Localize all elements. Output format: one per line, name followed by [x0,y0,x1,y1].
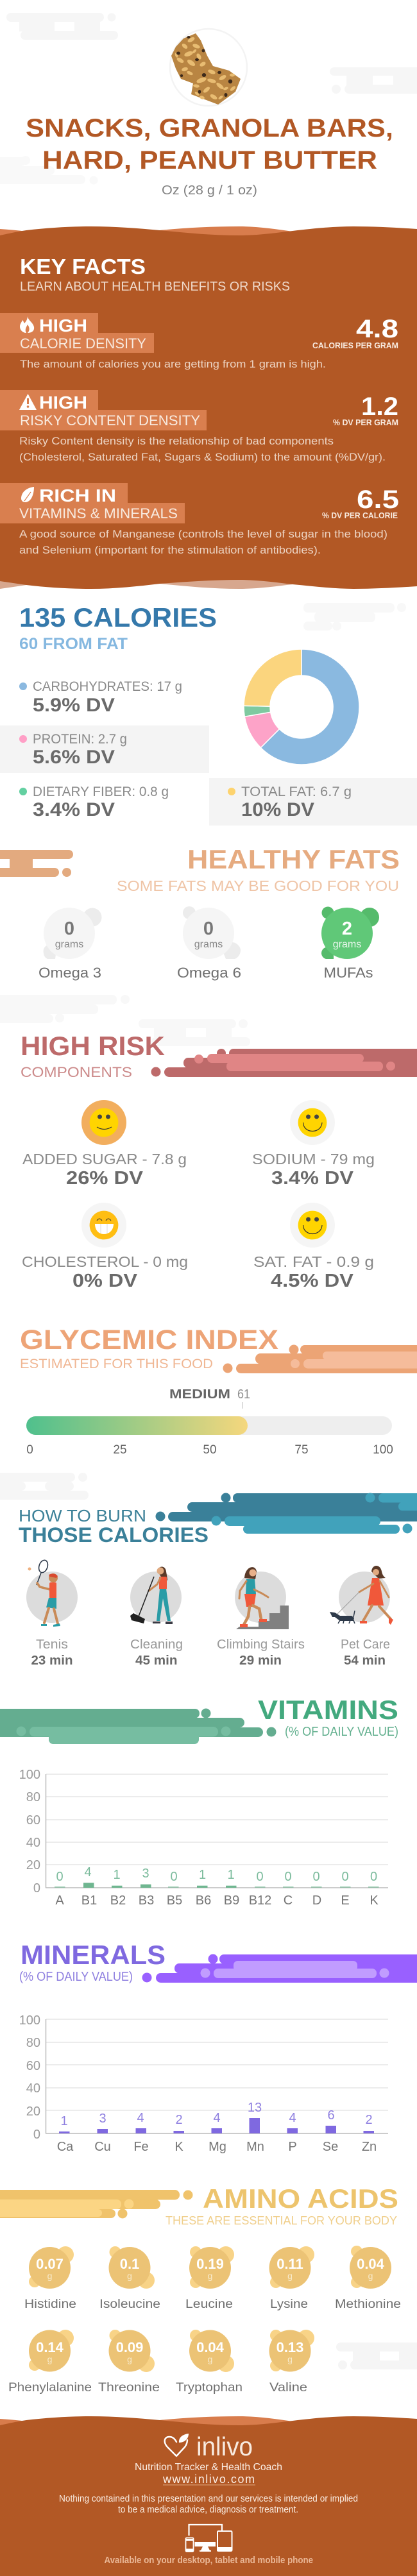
x axis labels: Cu [94,2140,111,2154]
item: added sugar [22,1100,187,1189]
value labels: 3 [142,1867,149,1881]
value labels: 0 [341,1870,349,1884]
fact: rich in vitamins and minerals [0,483,399,556]
badge: omega 3: Omega 3 [38,965,101,981]
value labels: 1 [227,1868,235,1882]
amino: methionine: Methionine [335,2297,401,2311]
heading: HEALTHY FATS [187,844,400,874]
activity: tennis: 23 min [31,1654,73,1668]
heading line 2: THOSE CALORIES [19,1523,208,1546]
badge: MUFAs: 2 [342,919,352,939]
y axis labels: 100 [19,1768,40,1782]
activity: pet care [330,1566,393,1668]
fact: calorie density: 4.8 [356,315,398,343]
item: saturated fat [253,1203,374,1291]
value labels [56,1865,377,1884]
legend: carbohydrates: 5.9% DV [33,695,115,716]
item: added sugar: ADDED SUGAR - 7.8 g [22,1151,187,1167]
amino: threonine [98,2330,160,2394]
amino: valine: Valine [269,2380,307,2394]
amino: histidine: 0.07 [36,2256,64,2272]
gauge scale: 0 [26,1443,33,1457]
value labels: 4 [289,2111,296,2125]
amino: threonine: 0.09 [116,2339,143,2355]
heading: VITAMINS [258,1695,398,1725]
amino: isoleucine: 0.1 [120,2256,139,2272]
legend: dietary fiber: 3.4% DV [33,799,115,820]
decorative bars [223,1344,417,1373]
amino: phenylalanine [8,2330,92,2394]
heading: key facts: KEY FACTS [20,255,146,278]
x axis labels: B1 [81,1894,97,1908]
fact: risky content density: RISKY CONTENT DENSITY [20,412,200,428]
x axis labels: K [174,2140,183,2154]
x axis labels: B12 [249,1894,271,1908]
amino: tryptophan [176,2330,243,2394]
tagline: Nutrition Tracker & Health Coach [135,2462,282,2473]
activity: cleaning: Cleaning [130,1638,183,1652]
gauge scale: 50 [203,1443,217,1457]
badge: omega 6: grams [194,939,223,950]
x axis labels: B9 [224,1894,239,1908]
amino: threonine: Threonine [98,2380,160,2394]
x axis labels: K [370,1894,379,1908]
badge: omega 6: 0 [203,919,214,939]
amino: isoleucine: Isoleucine [99,2297,160,2311]
fact: rich in vitamins and minerals: VITAMINS & MINERALS [19,505,178,521]
x axis labels: C [284,1894,293,1908]
vitamins bar chart [19,1768,388,1908]
x axis labels: D [312,1894,321,1908]
fact: calorie density: CALORIE DENSITY [20,335,146,352]
x axis labels: A [55,1894,64,1908]
cloud [336,2343,417,2369]
value labels: 0 [370,1870,377,1884]
fact: rich in vitamins and minerals: RICH IN [39,486,116,505]
gauge reading: 61 [237,1387,250,1402]
badge: MUFAs [321,907,379,981]
decorative bars [0,1709,276,1744]
panel: vitamins [0,1695,398,1908]
panel: amino acids [0,2183,417,2394]
panel: healthy fats [0,844,400,981]
gridlines [46,1774,388,1865]
amino: leucine: 0.19 [196,2256,224,2272]
y axis labels [19,2013,40,2142]
activity: cleaning [130,1566,183,1668]
panel waves [0,226,417,589]
x axis labels: B6 [196,1894,211,1908]
disclaimer: to be a medical advice, diagnosis or treatment. [118,2504,298,2515]
gauge bar [26,1416,392,1435]
amino: leucine: Leucine [185,2297,233,2311]
value labels: 6 [327,2108,335,2123]
item: cholesterol [22,1203,188,1291]
amino: lysine [269,2246,314,2311]
fact: calorie density: CALORIES PER GRAM [312,341,398,350]
cloud left lower [0,156,98,185]
activity: climbing stairs: Climbing Stairs [217,1638,305,1652]
x axis labels: B3 [139,1894,154,1908]
cloud [303,603,406,631]
logo: inlivo: inlivo [196,2432,253,2461]
y axis labels: 60 [26,1813,40,1827]
item: added sugar: 26% DV [66,1168,144,1189]
x axis labels: B5 [167,1894,182,1908]
fact: rich in vitamins and minerals: % DV PER CALORIE [322,511,398,520]
icon: flame [20,316,34,333]
item: saturated fat: SAT. FAT - 0.9 g [253,1253,374,1270]
badge: MUFAs: MUFAs [323,965,373,981]
cloud top left [6,13,118,40]
heading: AMINO ACIDS [203,2183,398,2214]
subheading: LEARN ABOUT HEALTH BENEFITS OR RISKS [20,280,290,294]
food ring [170,29,247,106]
y axis labels: 20 [26,2105,40,2119]
fact: rich in vitamins and minerals: A good source of Manganese (controls the level of sugar in the blood) [19,529,387,540]
decorative bars [0,2190,192,2218]
value labels: 0 [256,1870,264,1884]
decorative bars [151,1049,417,1077]
value labels: 3 [99,2112,106,2126]
y axis labels: 100 [19,2013,40,2028]
panel: key facts [0,226,417,589]
heading: MINERALS [21,1940,166,1970]
legend: total fat: TOTAL FAT: 6.7 g [241,784,352,799]
x axis labels: Zn [362,2140,377,2154]
gauge scale: 75 [294,1443,309,1457]
item: cholesterol: CHOLESTEROL - 0 mg [22,1253,188,1270]
badge: MUFAs: grams [333,939,361,950]
fact: risky content density: % DV PER GRAM [333,418,398,427]
value labels: 0 [312,1870,320,1884]
footer background waves [0,2416,417,2576]
amino: methionine: g [368,2271,373,2281]
badge: omega 3: 0 [64,919,74,939]
panel: glycemic index [20,1325,417,1457]
amino: tryptophan: 0.04 [196,2339,225,2355]
subheading: 60 from fat: 60 FROM FAT [19,635,128,653]
title: HARD, PEANUT BUTTER [42,146,377,174]
gauge scale [26,1443,393,1457]
amino: phenylalanine: 0.14 [36,2339,64,2355]
legend: protein [19,732,127,768]
legend: protein: 5.6% DV [33,747,115,768]
badge: omega 6: Omega 6 [177,965,241,981]
badge: omega 6 [177,906,241,981]
amino: isoleucine: g [127,2271,132,2281]
x axis labels: P [288,2140,297,2154]
y axis labels: 0 [33,2128,40,2142]
panel: minerals [19,1940,417,2154]
cloud [0,1473,89,1500]
amino: valine: 0.13 [277,2339,303,2355]
heading: GLYCEMIC INDEX [20,1325,278,1355]
value labels: 2 [175,2113,183,2127]
panel: calories [0,602,417,826]
amino: histidine [24,2246,76,2311]
legend: total fat [228,784,352,820]
amino: lysine: 0.11 [277,2256,303,2272]
activity: tennis [26,1559,78,1668]
value labels: 2 [365,2113,373,2127]
item: sodium [252,1100,375,1189]
panel: footer [0,2416,417,2576]
y axis labels [19,1768,40,1895]
website: www.inlivo.com [162,2473,255,2486]
disclaimer [59,2493,358,2515]
gauge scale: 25 [113,1443,127,1457]
value labels: 1 [60,2114,68,2128]
disclaimer: Nothing contained in this presentation and our services is intended or implied [59,2493,358,2504]
amino: tryptophan: Tryptophan [176,2380,243,2394]
row backgrounds [0,725,417,826]
fact: risky content density: Risky Content density is the relationship of bad components [19,436,334,447]
y axis labels: 0 [33,1881,40,1895]
header section [0,13,417,198]
legend: carbohydrates [19,679,182,716]
x axis labels: Se [323,2140,338,2154]
item: saturated fat: 4.5% DV [271,1271,354,1291]
subheading: ESTIMATED FOR THIS FOOD [20,1357,213,1371]
value labels: 1 [199,1868,206,1882]
serving size: Oz (28 g / 1 oz) [162,183,257,198]
item: cholesterol: 0% DV [72,1271,138,1291]
fact: calorie density: HIGH [39,316,87,335]
title [26,114,393,174]
amino: phenylalanine: g [47,2354,52,2364]
logo: inlivo [165,2432,253,2461]
legend: total fat: 10% DV [241,799,314,820]
icon: devices [185,2525,232,2552]
minerals bar chart [19,2013,388,2154]
fact: rich in vitamins and minerals: 6.5 [357,486,399,514]
amino: phenylalanine: Phenylalanine [8,2380,92,2394]
title: SNACKS, GRANOLA BARS, [26,114,393,142]
x axis labels: Mg [208,2140,226,2154]
amino: histidine: g [47,2271,52,2281]
y axis labels: 80 [26,1790,40,1804]
subheading: (% OF DAILY VALUE) [285,1725,398,1739]
gridlines [46,2019,388,2110]
legend: dietary fiber: DIETARY FIBER: 0.8 g [33,784,169,799]
bars [59,2118,374,2133]
amino: threonine: g [127,2354,132,2364]
x axis labels: Fe [133,2140,149,2154]
subheading: SOME FATS MAY BE GOOD FOR YOU [117,877,399,894]
amino: lysine: g [287,2271,293,2281]
amino: valine: g [287,2354,293,2364]
fact: risky content density: HIGH [39,393,87,412]
amino: tryptophan: g [208,2354,212,2364]
item: sodium: SODIUM - 79 mg [252,1151,375,1167]
subheading: COMPONENTS [21,1064,132,1080]
legend: dietary fiber [19,784,169,820]
amino: histidine: Histidine [24,2297,76,2311]
gauge scale: 100 [373,1443,393,1457]
legend: protein: PROTEIN: 2.7 g [33,732,127,747]
x axis labels: B2 [110,1894,126,1908]
item: sodium: 3.4% DV [271,1168,354,1189]
value labels: 4 [84,1865,92,1879]
amino: methionine: 0.04 [357,2256,385,2272]
y axis labels: 20 [26,1858,40,1872]
badge: omega 3 [38,908,101,981]
activity: climbing stairs: 29 min [239,1654,282,1668]
panel: high risk components [0,995,417,1291]
amino: leucine: g [208,2271,212,2281]
legend: carbohydrates: CARBOHYDRATES: 17 g [33,679,182,694]
amino: lysine: Lysine [270,2297,308,2311]
y axis labels: 40 [26,2081,40,2096]
value labels: 0 [56,1870,64,1884]
panel: how to burn those calories [0,1473,417,1668]
icon: leaf [21,487,34,502]
amino: leucine [185,2246,234,2311]
fact: calorie density [0,313,398,370]
fact: risky content density: 1.2 [361,393,398,421]
fact: calorie density: The amount of calories you are getting from 1 gram is high. [20,359,326,370]
decorative bars [155,1493,417,1534]
subheading: (% OF DAILY VALUE) [19,1970,133,1984]
icon: warning triangle [19,394,37,410]
heading: HIGH RISK [21,1031,165,1061]
amino: valine [269,2330,314,2394]
x axis labels [55,1894,379,1908]
value labels: 13 [248,2101,262,2115]
activity: cleaning: 45 min [135,1654,177,1668]
fact: risky content density [0,390,398,463]
value labels [60,2101,373,2128]
y axis labels: 60 [26,2059,40,2073]
y axis labels: 40 [26,1836,40,1850]
activity: tennis: Tenis [36,1638,68,1652]
amino: methionine [335,2246,401,2311]
decorative bars [142,1954,417,1983]
activity: pet care: 54 min [344,1654,386,1668]
badge: omega 3: grams [55,939,83,950]
amino: isoleucine [99,2246,160,2311]
availability note: Available on your desktop, tablet and mobile phone [104,2555,313,2566]
heading line 1: HOW TO BURN [19,1506,146,1525]
donut chart [244,649,359,765]
clouds [0,995,250,1046]
decorative bars [0,850,73,877]
bars [55,1883,379,1888]
value labels: 1 [113,1868,121,1882]
food image: granola bar [171,33,241,105]
gauge reading: MEDIUM [169,1387,230,1402]
x axis labels [57,2140,377,2154]
fact: risky content density: (Cholesterol, Saturated Fat, Sugars & Sodium) to the amount (%DV/gr). [19,452,386,463]
value labels: 0 [284,1870,292,1884]
heading: 135 calories: 135 CALORIES [19,602,217,632]
x axis labels: Ca [57,2140,74,2154]
gauge reading [169,1387,250,1409]
value labels: 0 [170,1870,178,1884]
y axis labels: 80 [26,2036,40,2050]
subheading: THESE ARE ESSENTIAL FOR YOUR BODY [166,2214,397,2227]
cloud right [330,67,417,94]
value labels: 4 [213,2111,221,2125]
x axis labels: Mn [246,2140,264,2154]
activity: pet care: Pet Care [341,1638,390,1652]
x axis labels: E [341,1894,350,1908]
value labels: 4 [137,2111,144,2125]
activity: climbing stairs [217,1567,305,1668]
fact: rich in vitamins and minerals: and Selenium (important for the stimulation of antibodies). [19,545,321,556]
